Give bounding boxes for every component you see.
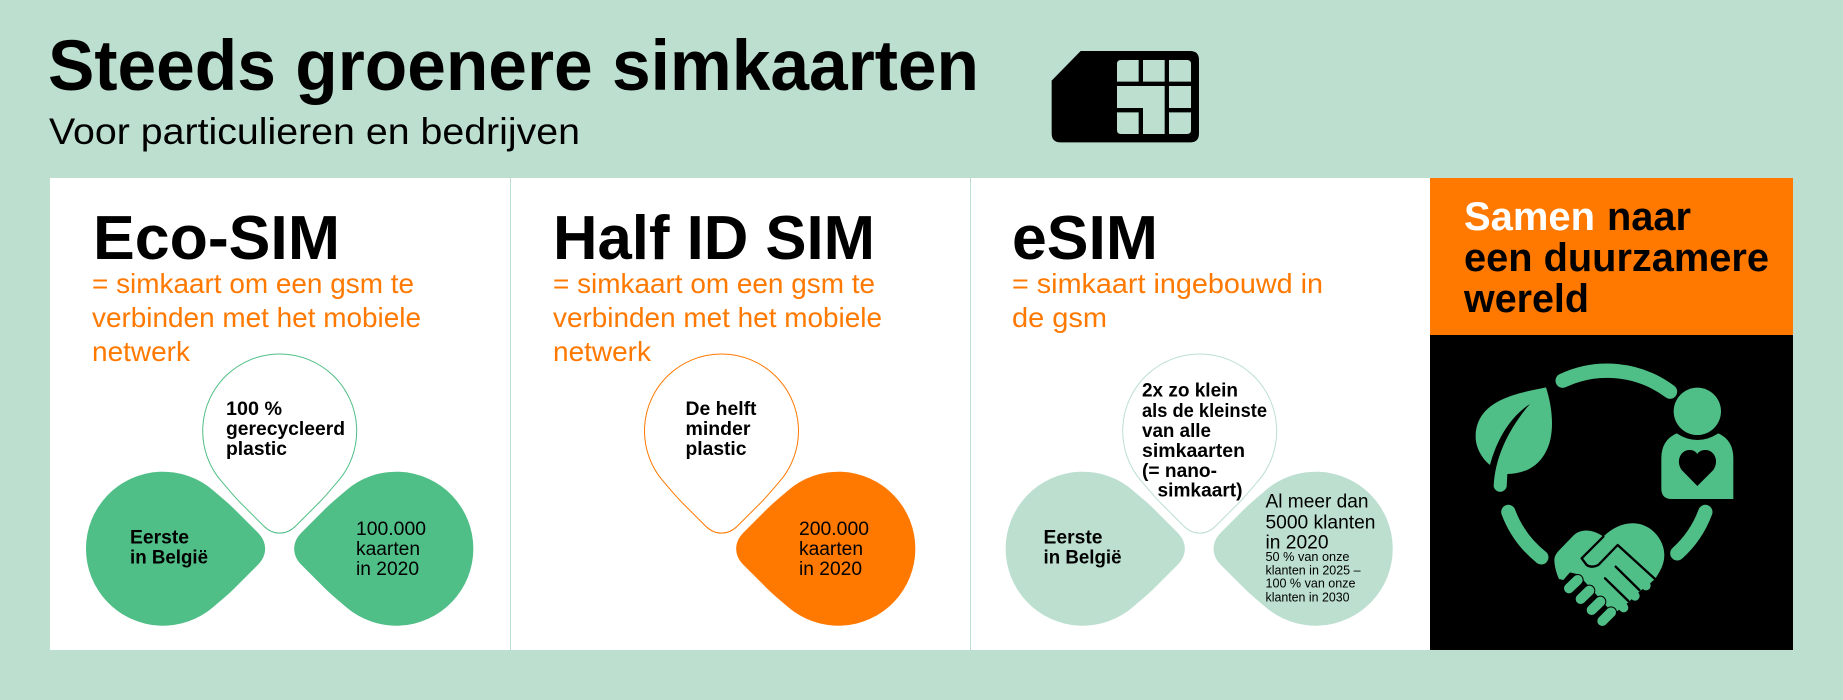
drop: 200.000 kaarten in 2020: in 2020 <box>799 559 862 580</box>
heading: Samen naar een duurzamere wereld <box>1463 195 1769 321</box>
definition text: = simkaart om een gsm te <box>92 268 414 299</box>
heading: Samen naar een duurzamere wereld: Samen <box>1464 195 1595 239</box>
heading: Samen naar een duurzamere wereld: naar <box>1607 195 1691 239</box>
heading: eSIM: eSIM <box>1012 204 1158 273</box>
drop: klanten: Al meer dan <box>1266 492 1368 513</box>
panel: Half ID SIM <box>511 178 970 650</box>
drop: Eerste in België <box>86 472 265 626</box>
panel: Eco-SIM <box>50 178 510 650</box>
drop: klanten: 50 % van onze <box>1266 549 1350 564</box>
panel: eSIM <box>971 178 1430 650</box>
drop: klanten: klanten in 2025 – <box>1266 562 1361 577</box>
drop: 100 % gerecycleerd plastic: 100 % <box>226 399 282 420</box>
drop: 2x zo klein <box>1123 354 1277 533</box>
icon: sustainability cycle <box>1476 371 1733 621</box>
drop: 100.000 kaarten in 2020: kaarten <box>356 539 420 560</box>
subtitle: Voor particulieren en bedrijven <box>49 111 580 152</box>
drop: 100.000 kaarten in 2020: in 2020 <box>356 559 419 580</box>
definition text: netwerk <box>553 336 652 367</box>
heading: Eco-SIM: Eco-SIM <box>93 204 340 273</box>
drop: 200.000 kaarten in 2020: kaarten <box>799 539 863 560</box>
drop: Eerste in België <box>1006 472 1185 626</box>
drop: klanten <box>1214 472 1393 626</box>
drop: Eerste in België: Eerste <box>130 527 189 548</box>
definition text: = simkaart ingebouwd in <box>1012 268 1323 299</box>
drop: De helft minder plastic: plastic <box>686 439 747 460</box>
drop: 100 % gerecycleerd plastic: plastic <box>226 439 287 460</box>
icon: person with heart <box>1661 388 1733 499</box>
drop: 200.000 kaarten in 2020: 200.000 <box>799 519 869 540</box>
drop: De helft minder plastic: De helft <box>686 399 757 420</box>
drop: Eerste in België: in België <box>1044 547 1122 568</box>
icon: leaf <box>1476 387 1552 492</box>
definition text <box>92 268 421 367</box>
definition text: = simkaart om een gsm te <box>553 268 875 299</box>
definition text: netwerk <box>92 336 191 367</box>
drop: 2x zo klein: simkaart) <box>1158 481 1242 502</box>
drop: 100 % gerecycleerd plastic <box>203 354 357 533</box>
drop: De helft minder plastic <box>644 354 798 533</box>
drop: 2x zo klein: van alle <box>1142 421 1211 442</box>
drop: 200.000 kaarten in 2020 <box>736 472 915 626</box>
drop: Eerste in België: in België <box>130 547 208 568</box>
drop: 100.000 kaarten in 2020: 100.000 <box>356 519 426 540</box>
icon: circular arcs <box>1508 371 1705 557</box>
icon: SIM card <box>1052 51 1199 142</box>
drop: Eerste in België: Eerste <box>1044 527 1102 548</box>
drop: 2x zo klein: (= nano- <box>1142 461 1217 482</box>
panel: orange heading <box>1430 178 1793 335</box>
panel: black icon panel <box>1430 335 1793 650</box>
definition text <box>1012 268 1323 333</box>
drop: klanten: 5000 klanten <box>1266 512 1376 533</box>
drop: 100.000 kaarten in 2020 <box>294 472 473 626</box>
drop: 2x zo klein: 2x zo klein <box>1142 381 1238 402</box>
definition text: de gsm <box>1012 302 1107 333</box>
icon: handshake <box>1554 523 1664 621</box>
heading: Samen naar een duurzamere wereld: wereld <box>1463 277 1589 321</box>
drop: klanten: 100 % van onze <box>1266 576 1356 591</box>
definition text <box>553 268 882 367</box>
drop: 2x zo klein: als de kleinste <box>1142 401 1267 422</box>
drop: De helft minder plastic: minder <box>686 419 751 440</box>
definition text: verbinden met het mobiele <box>553 302 882 333</box>
heading: Half ID SIM: Half ID SIM <box>553 204 875 273</box>
drop: klanten: klanten in 2030 <box>1266 590 1350 605</box>
drop: 100 % gerecycleerd plastic: gerecycleerd <box>226 419 345 440</box>
definition text: verbinden met het mobiele <box>92 302 421 333</box>
title: Steeds groenere simkaarten <box>48 27 979 106</box>
drop: klanten: in 2020 <box>1266 532 1328 553</box>
heading: Samen naar een duurzamere wereld: een duurzamere <box>1464 236 1769 280</box>
drop: 2x zo klein: simkaarten <box>1142 441 1245 462</box>
